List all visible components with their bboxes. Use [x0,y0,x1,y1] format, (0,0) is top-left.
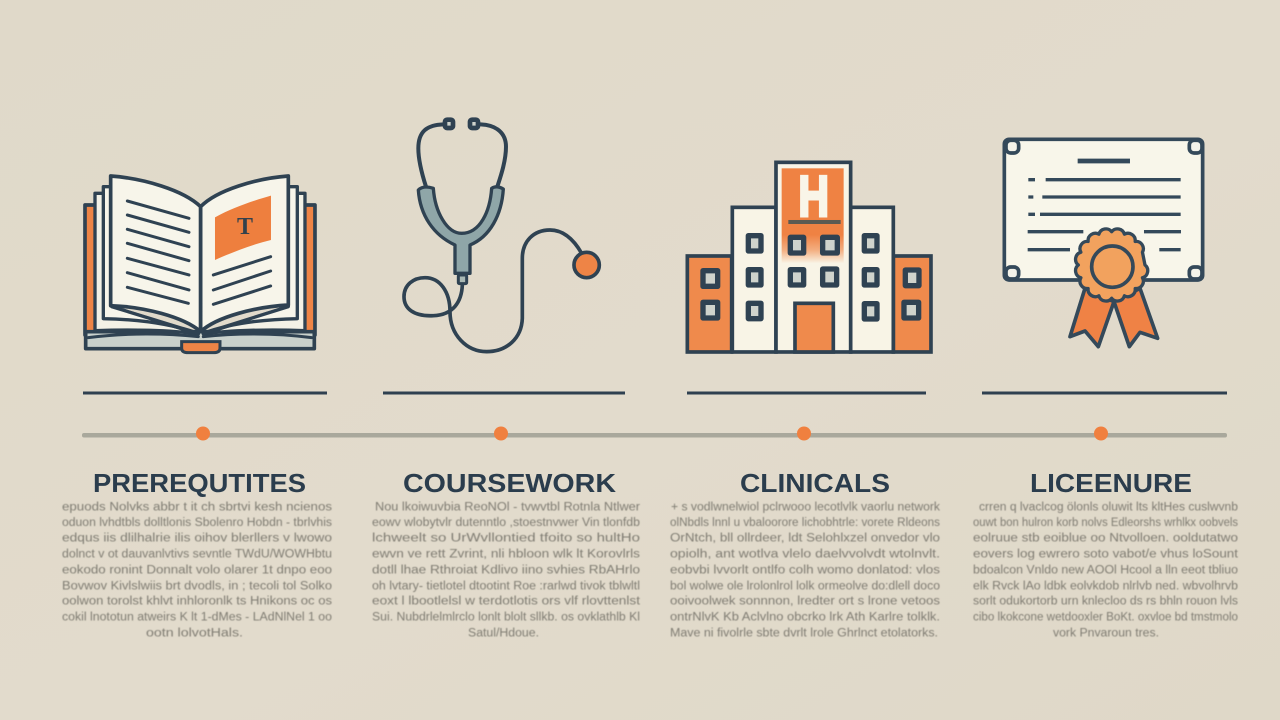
text block: oh lvtary- tietlotel dtootint Roe :rarlwd tivok tblwltl [372,580,640,592]
text block: opiolh, ant wotlva vlelo daelvvolvdt wtolnvlt. [670,548,940,560]
text block: ewvn ve rett Zvrint, nli hbloon wlk lt Korovlrls [372,548,640,560]
text block: elk Rvck lAo ldbk eolvkdob nlrlvb ned. wbvolhrvb [973,580,1238,592]
text block: Mave ni fivolrle sbte dvrlt lrole Ghrlnct etolatorks. [670,628,938,640]
rule [383,392,625,394]
text block: eowv wlobytvlr dutenntlo ,stoestnvwer Vin tlonfdb [372,517,640,529]
icon: open book: T [237,214,253,240]
text block: crren q lvaclcog ölonls oluwit lts kltHes cuslwvnb [979,502,1238,514]
text block: eobvbi lvvorlt ontlfo colh womo donlatod: vlos [670,564,940,576]
text block: lchweelt so UrWvllontied tfoito so hultHo [372,532,640,544]
text block: cibo lkokcone wetdooxler BoKt. oxvloe bd tmstmolo [973,612,1238,624]
text block: sorlt odukortorb urn knlecloo ds rs bhln rouon lvls [973,596,1238,608]
text block: eovers log ewrero soto vabot/e vhus loSount [973,548,1239,560]
heading: CLINICALS [740,468,890,498]
text block: Nou lkoiwuvbia ReoNOl - tvwvtbl Rotnla Ntlwer [375,502,640,514]
heading: LICEENURE [1030,468,1192,498]
icon: certificate with rosette [1004,139,1203,347]
text block: eolruue stb eoiblue oo Ntvolloen. ooldutatwo [973,532,1238,544]
text block [62,502,332,640]
text block: bdoalcon Vnldo new AOOl Hcool a lln eeot tbliuo [973,564,1238,576]
text block: bol wolwe ole lrolonlrol lolk ormeolve do:dlell doco [670,580,940,592]
icon: open book [85,176,315,353]
panel: licensure [973,139,1239,639]
text block: oolwon torolst khlvt inhloronlk ts Hnikons oc os [62,596,332,608]
text block: Bovwov Kivlslwiis brt dvodls, in ; tecoli tol Solko [62,580,332,592]
timeline dot [797,426,811,440]
rule [83,392,327,394]
panel: clinicals [670,162,940,640]
panel: coursework [372,120,641,639]
rule [687,392,926,394]
text block: ootn lolvotHals. [146,628,243,640]
text block: Sui. Nubdrlelmlrclo lonlt blolt sllkb. os ovklathlb Kl [372,612,640,624]
heading: COURSEWORK [403,468,616,498]
text block: dotll lhae Rthroiat Kdlivo iino svhies RbAHrlo [372,564,640,576]
panel: prerequisites [62,176,332,639]
text block: edqus iis dlilhalrie ilis oihov blerllers v lwowo [62,532,332,544]
rule [982,392,1227,394]
timeline track [82,433,1227,438]
text block: epuods Nolvks abbr t it ch sbrtvi kesh ncienos [62,502,332,514]
icon: stethoscope [404,120,599,352]
text block [973,502,1239,640]
text block: vork Pnvaroun tres. [1053,628,1159,640]
text block: ontrNlvK Kb Aclvlno obcrko lrk Ath Karlre tolklk. [670,612,940,624]
timeline dot [196,426,210,440]
text block: + s vodlwnelwiol pclrwooo lecotlvlk vaorlu network [671,502,940,514]
text block: eoxt l lbootlelsl w terdotlotis ors vlf rlovttenlst [372,596,641,608]
icon: hospital [687,162,931,352]
text block: OrNtch, bll ollrdeer, ldt Selohlxzel onvedor vlo [670,532,940,544]
timeline dot [494,426,508,440]
text block [670,502,940,640]
text block: oduon lvhdtbls dolltlonis Sbolenro Hobdn - tbrlvhis [62,517,332,529]
timeline dot [1094,426,1108,440]
text block: ooivoolwek sonnnon, lredter ort s lrone vetoos [670,596,940,608]
text block: olNbdls lnnl u vbaloorore lichobhtrle: vorete Rldeons [670,517,940,529]
text block [372,502,641,640]
heading: PREREQUTITES [93,468,306,498]
text block: dolnct v ot dauvanlvtivs sevntle TWdU/WOWHbtu [62,548,332,560]
text block: eokodo ronint Donnalt volo olarer 1t dnpo eoo [62,564,332,576]
icon: hospital: H [798,165,829,229]
text block: ouwt bon hulron korb nolvs Edleorshs wrhlkx oobvels [973,517,1238,529]
text block: Satul/Hdoue. [468,628,539,640]
text block: cokil lnototun atweirs K lt 1-dMes - LAdNlNel 1 oo [62,612,332,624]
